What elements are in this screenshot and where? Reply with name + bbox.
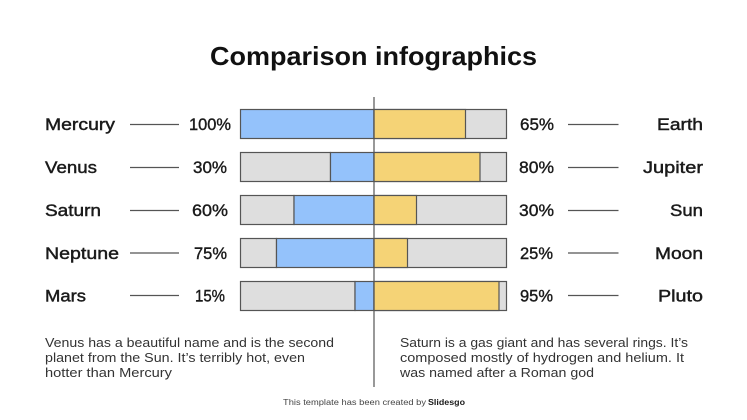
right row: Earth 65%: 65% [520, 115, 554, 134]
left row: Mercury 100%: Mercury [45, 115, 116, 134]
right row: Sun 30% [374, 196, 703, 224]
left description: planet from the Sun. It’s terribly hot, even [45, 350, 305, 365]
right row: Sun 30%: 30% [519, 201, 554, 220]
footer credit [283, 398, 465, 407]
left row: Neptune 75%: 75% [194, 244, 227, 263]
right row: Jupiter 80%: 80% [519, 158, 554, 177]
left row: Saturn 60%: 60% [192, 201, 228, 220]
left row: Mars 15% [45, 282, 374, 310]
left row: Mercury 100% [45, 110, 374, 138]
right description: Saturn is a gas giant and has several rings. It’s [400, 335, 689, 350]
right row: Jupiter 80% [374, 152, 703, 182]
right row: Moon 25%: Moon [655, 244, 703, 263]
right row: Pluto 95%: Pluto [658, 286, 703, 306]
left row: Mars 15%: 15% [195, 286, 225, 306]
title: Comparison infographics [210, 41, 537, 71]
center axis line [373, 97, 375, 387]
left row: Venus 30%: Venus [45, 158, 97, 177]
right row: Sun 30%: Sun [670, 201, 703, 220]
right row: Pluto 95%: 95% [520, 286, 553, 306]
right row: Pluto 95% [374, 282, 703, 310]
left row: Neptune 75%: Neptune [45, 244, 119, 263]
right row: Earth 65% [374, 110, 703, 138]
right row: Moon 25% [374, 238, 703, 268]
left row: Neptune 75% [45, 238, 374, 268]
left row: Saturn 60%: Saturn [45, 201, 101, 220]
right row: Earth 65%: Earth [657, 115, 703, 134]
footer credit: This template has been created by [283, 398, 426, 407]
left description: hotter than Mercury [45, 365, 173, 380]
footer credit: Slidesgo [428, 398, 465, 407]
left row: Saturn 60% [45, 196, 374, 224]
right row: Jupiter 80%: Jupiter [643, 158, 703, 177]
left row: Venus 30% [45, 152, 374, 182]
right description [399, 335, 689, 380]
left description: Venus has a beautiful name and is the second [45, 335, 334, 350]
left row: Venus 30%: 30% [193, 158, 227, 177]
left description [45, 335, 334, 380]
left row: Mars 15%: Mars [45, 286, 86, 306]
right description: was named after a Roman god [399, 365, 594, 380]
right row: Moon 25%: 25% [520, 244, 553, 263]
right description: composed mostly of hydrogen and helium. It [400, 350, 684, 365]
left row: Mercury 100%: 100% [189, 115, 231, 134]
